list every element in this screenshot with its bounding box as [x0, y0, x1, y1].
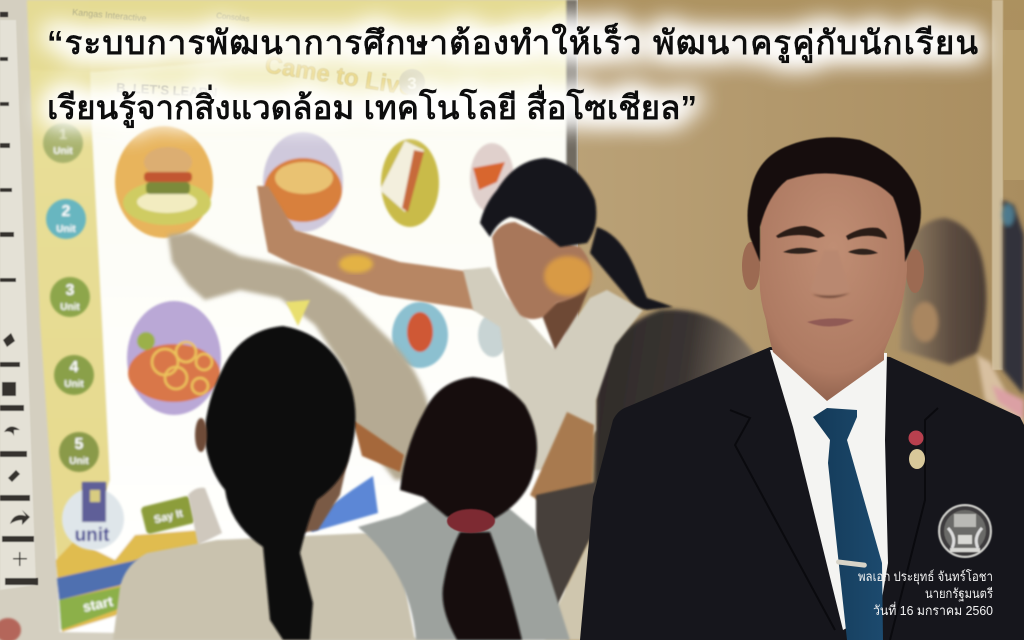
teacher: projected light on cheek	[544, 256, 592, 296]
left eye	[783, 248, 818, 254]
teacher: lower arm	[530, 412, 594, 505]
toolbar strip on board frame	[0, 12, 38, 590]
unit 2 badge: unit	[75, 525, 110, 546]
unit 3: 3	[66, 282, 75, 299]
girl left: ear	[195, 418, 207, 452]
interactive whiteboard screen: start	[81, 593, 115, 615]
headline quote: เรียนรู้จากสิ่งแวดล้อม เทคโนโลยี สื่อโซเชียล”	[47, 84, 697, 129]
say it button: Say It	[153, 507, 184, 526]
teacher: leg	[545, 540, 590, 640]
teacher: hair	[480, 158, 596, 247]
food: fourth plate	[470, 143, 514, 213]
child left: girl with braid	[113, 326, 415, 640]
unit 3: Unit	[60, 302, 80, 313]
minister: suit	[580, 347, 1024, 640]
minister: ears	[742, 242, 924, 293]
caption: name, position, date: วันที่ 16 มกราคม 2560	[873, 602, 993, 618]
unit 1	[43, 123, 83, 163]
board frame	[0, 0, 578, 640]
unit 2: Unit	[56, 224, 76, 235]
minister: tie clip	[836, 559, 867, 568]
headline quote	[47, 22, 978, 129]
brand label: Kangas Interactive	[72, 7, 147, 23]
teacher: shirt	[463, 267, 643, 470]
figure: ear	[912, 302, 938, 342]
caption: name, position, date: พลเอก ประยุทธ์ จันทร์โอชา	[858, 569, 993, 585]
blue panel	[307, 476, 378, 532]
minister: tie	[813, 408, 883, 640]
food: sandwich	[380, 139, 439, 227]
figure: shirt	[977, 355, 1024, 425]
minister: nose	[810, 250, 850, 298]
minister portrait	[580, 137, 1024, 640]
teacher: face	[492, 222, 592, 319]
teacher: ponytail	[590, 227, 673, 310]
figure: pink shirt	[992, 385, 1024, 420]
unit 4: 4	[70, 359, 79, 376]
right eye	[848, 249, 878, 255]
figure: hair	[900, 218, 986, 365]
lets learn: B. LET'S LEARN	[116, 80, 218, 100]
far right blue accent	[1002, 204, 1014, 226]
girl right: ponytail	[443, 532, 522, 640]
girl left: neck	[290, 450, 350, 535]
unit 5: 5	[75, 436, 84, 453]
teacher: skirt	[536, 482, 596, 625]
unit buttons	[43, 123, 124, 550]
interactive whiteboard screen	[27, 0, 577, 640]
yellow spot under arm	[286, 300, 310, 326]
food: burger	[115, 126, 213, 238]
menu label: Consolas	[216, 11, 250, 23]
girl left: hand	[188, 488, 222, 545]
minister: pins	[908, 430, 925, 469]
unit 5	[59, 432, 99, 472]
minister: hair	[748, 137, 921, 262]
unit 3	[50, 277, 90, 317]
number badge: 3	[407, 74, 417, 93]
minister: eyes and brows	[776, 226, 887, 255]
girl right: hair	[400, 377, 537, 520]
say it button	[140, 495, 196, 535]
unit 2 badge	[62, 482, 124, 550]
unit 2: 2	[62, 203, 71, 220]
wall figure behind minister	[900, 200, 1024, 425]
minister: lapel shadow lines	[730, 408, 938, 640]
girl right: shirt	[358, 500, 570, 640]
bottom-left fingers	[0, 618, 21, 640]
food: pizza	[263, 132, 343, 232]
teacher: neck	[540, 285, 590, 350]
food: bottom plates	[392, 302, 508, 368]
teacher: other hand	[353, 420, 404, 472]
child right: girl with ponytail	[358, 377, 570, 640]
headline quote: “ระบบการพัฒนาการศึกษาต้องทำให้เร็ว พัฒนาครูคู่กับนักเรียน	[47, 22, 978, 64]
girl right: hair tie	[447, 509, 495, 533]
unit 5: Unit	[69, 456, 89, 467]
food illustrations on screen	[115, 126, 514, 535]
faint top screen labels	[72, 7, 425, 101]
minister: face and neck	[760, 170, 907, 401]
girl left: dotted shirt	[113, 533, 415, 640]
caption: name, position, date: นายกรัฐมนตรี	[925, 586, 993, 602]
unit 1: 1	[59, 126, 67, 143]
unit 4: Unit	[64, 379, 84, 390]
girl left: hair and braid	[204, 326, 356, 640]
food: onion rings	[127, 301, 221, 415]
title: came to live: Came to Live	[263, 51, 415, 101]
caption: name, position, date	[858, 569, 993, 618]
child in front of the teacher, fading into fog	[593, 310, 755, 530]
far right person	[1003, 200, 1024, 395]
unit 2	[46, 199, 86, 239]
right brow	[846, 228, 887, 240]
left brow	[776, 226, 825, 238]
unit 4	[54, 355, 94, 395]
minister: mouth	[807, 318, 854, 327]
minister: shirt	[770, 350, 888, 630]
number badge	[399, 69, 425, 95]
teacher	[257, 158, 673, 640]
teacher: arm	[257, 186, 476, 310]
shadow of arm on the board	[168, 232, 432, 480]
government seal	[939, 505, 991, 557]
unit 1: Unit	[53, 146, 73, 157]
